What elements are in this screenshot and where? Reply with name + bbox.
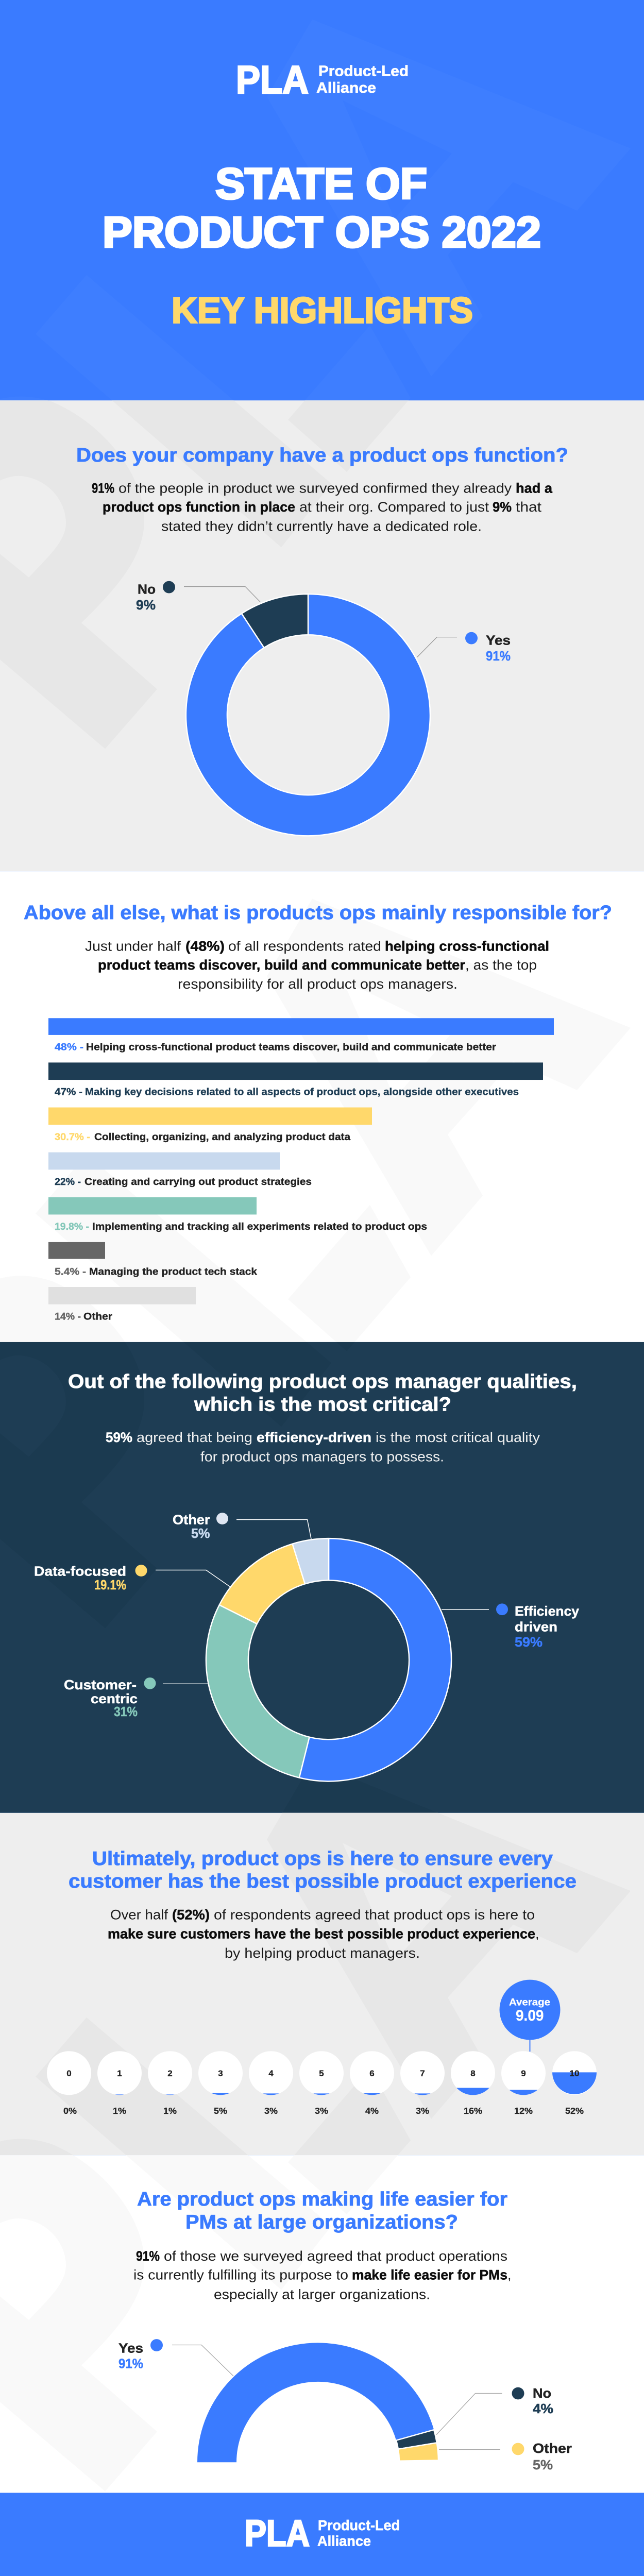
text block: of all respondents rated [228, 939, 381, 954]
score 7 [400, 2051, 445, 2116]
heading: customer has the best possible product experience [69, 1871, 577, 1892]
callout: customer-centric: centric [91, 1692, 138, 1706]
callout: other: Other [173, 1513, 210, 1527]
score 2: 2 [167, 2069, 173, 2078]
callout: efficiency driven: Efficiency [515, 1604, 580, 1619]
bar: tech stack 5.4%: Managing the product tech stack [89, 1266, 258, 1277]
score 1 [97, 2051, 142, 2116]
bar: other 14%: 14% - [55, 1311, 81, 1322]
text block: at their org. Compared to just [299, 499, 489, 515]
callout: data-focused [34, 1565, 230, 1592]
panel: header [104, 65, 540, 324]
heading: Ultimately, product ops is here to ensure every [92, 1848, 553, 1870]
score 5: 3% [315, 2106, 328, 2116]
text block: (52%) [172, 1907, 210, 1923]
callout: yes: Yes [118, 2341, 143, 2355]
text block: , [507, 2267, 512, 2283]
text block: of respondents agreed that product ops is here to [214, 1907, 535, 1923]
bar: product data 30.7%: Collecting, organizing, and analyzing product data [94, 1131, 351, 1143]
text block: of the people in product we surveyed confirmed they already [118, 481, 512, 496]
bar: key decisions 47% [48, 1062, 543, 1098]
callout: average score [500, 1980, 561, 2052]
score 5 [299, 2051, 344, 2116]
text block: especially at larger organizations. [214, 2286, 430, 2302]
text block: responsibility for all product ops managers. [178, 976, 457, 992]
bar: helping teams 48%: 48% - [55, 1042, 83, 1053]
text block: 91% [136, 2248, 160, 2264]
heading [69, 1848, 577, 1892]
logo: Product-Led Alliance: Alliance [316, 80, 376, 96]
score 9 [501, 2051, 546, 2116]
text block: 59% [106, 1430, 132, 1445]
rating scale 0 to 10 [47, 2051, 597, 2116]
callout: yes: Yes [486, 634, 511, 648]
logo: Product-Led Alliance [245, 2513, 400, 2554]
callout: data-focused: Data-focused [34, 1565, 126, 1579]
text block [106, 1430, 540, 1465]
callout: other: 5% [191, 1527, 210, 1541]
text block [133, 2248, 512, 2302]
callout: efficiency driven: driven [515, 1620, 557, 1634]
logo: Product-Led Alliance: Product-Led [318, 2517, 400, 2533]
title: PRODUCT OPS 2022 [103, 208, 541, 257]
panel: product ops function [0, 400, 644, 871]
bar: experiments 19.8%: Implementing and tracking all experiments related to product ops [92, 1221, 427, 1232]
text block: make life easier for PMs [352, 2267, 507, 2283]
bar: tech stack 5.4%: 5.4% - [55, 1266, 86, 1277]
heading: Above all else, what is products ops mainly responsible for? [24, 902, 612, 924]
text block: Just under half [85, 939, 181, 954]
text block: , [535, 1926, 539, 1941]
score 3 [198, 2051, 243, 2116]
panel: life easier for PMs [0, 2155, 644, 2493]
text block: Over half [110, 1907, 168, 1923]
score 0 [47, 2051, 91, 2116]
text block [85, 939, 549, 992]
score 3: 3 [218, 2069, 223, 2078]
heading [68, 1371, 577, 1416]
bar: helping teams 48%: Helping cross-functional product teams discover, build and communicate better [86, 1042, 496, 1053]
text block: efficiency-driven [257, 1430, 371, 1445]
panel: footer [0, 2493, 644, 2576]
title [103, 159, 541, 257]
score 9: 12% [514, 2106, 533, 2116]
callout: yes: 91% [486, 649, 511, 664]
bar: other 14%: Other [83, 1311, 112, 1322]
bar chart [48, 1018, 554, 1322]
callout: customer-centric [64, 1677, 208, 1719]
score 0: 0 [66, 2069, 72, 2078]
text block: product ops function in place [103, 499, 295, 515]
score 2 [148, 2051, 192, 2116]
heading: Does your company have a product ops function? [76, 445, 568, 466]
callout: average score: Average [509, 1997, 550, 2008]
bar: product strategies 22%: Creating and carrying out product strategies [84, 1176, 312, 1188]
bar: product data 30.7%: 30.7% - [55, 1131, 90, 1143]
callout: other [439, 2442, 572, 2472]
score 6: 4% [365, 2106, 379, 2116]
logo: Product-Led Alliance: PLA [245, 2513, 310, 2554]
logo: Product-Led Alliance: Product-Led [318, 63, 409, 79]
callout: no: No [138, 583, 156, 597]
score 8: 8 [470, 2069, 476, 2078]
score 1: 1% [113, 2106, 126, 2116]
panel: customer experience [0, 1812, 644, 2156]
score 6: 6 [369, 2069, 375, 2078]
callout: no [436, 2386, 553, 2435]
score 6 [350, 2051, 394, 2116]
callout: customer-centric: Customer- [64, 1678, 137, 1692]
bar: key decisions 47%: Making key decisions related to all aspects of product ops, alongside other executives [85, 1087, 519, 1098]
callout: no [136, 581, 260, 613]
callout: no: 4% [533, 2402, 553, 2416]
heading [137, 2189, 507, 2233]
score 8: 16% [464, 2106, 482, 2116]
score 0: 0% [63, 2106, 77, 2116]
bar: product data 30.7% [48, 1108, 372, 1143]
text block: had a [516, 481, 553, 496]
text block: of those we surveyed agreed that product operations [164, 2248, 507, 2264]
callout: yes [118, 2339, 233, 2376]
bar: experiments 19.8% [48, 1197, 427, 1232]
callout: efficiency driven [442, 1603, 580, 1650]
callout: other [173, 1513, 311, 1541]
callout: no: No [533, 2386, 551, 2401]
subtitle: key highlights: KEY HIGHLIGHTS [172, 290, 473, 331]
callout: data-focused: 19.1% [94, 1578, 126, 1592]
bar: other 14% [48, 1287, 196, 1322]
bar: helping teams 48% [48, 1018, 554, 1053]
title: STATE OF [215, 159, 427, 208]
text block [108, 1907, 539, 1961]
text block: make sure customers have the best possible product experience [108, 1926, 535, 1941]
score 4: 4 [268, 2069, 274, 2078]
text block: (48%) [185, 939, 225, 954]
score 4 [249, 2051, 293, 2116]
text block: stated they didn’t currently have a dedicated role. [161, 519, 482, 534]
text block: , as the top [465, 957, 537, 973]
callout: efficiency driven: 59% [515, 1635, 543, 1650]
text block: 9% [493, 499, 512, 515]
heading: Out of the following product ops manager qualities, [68, 1371, 577, 1393]
text block [92, 481, 553, 534]
text block: that [516, 499, 542, 515]
panel: main responsibility [0, 871, 644, 1342]
heading: PMs at large organizations? [185, 2212, 458, 2233]
score 2: 1% [163, 2106, 177, 2116]
bar: key decisions 47%: 47% - [55, 1087, 82, 1098]
score 9: 9 [521, 2069, 526, 2078]
text block: agreed that being [137, 1430, 252, 1445]
score 5: 5 [319, 2069, 324, 2078]
callout: yes [417, 632, 511, 664]
text block: is currently fulfilling its purpose to [133, 2267, 348, 2283]
panel: manager qualities [0, 1342, 644, 1813]
text block: for product ops managers to possess. [200, 1449, 444, 1465]
logo: Product-Led Alliance [236, 59, 409, 102]
score 8 [451, 2051, 495, 2116]
bar: tech stack 5.4% [48, 1242, 258, 1277]
callout: other: Other [533, 2442, 572, 2456]
score 10: 52% [565, 2106, 584, 2116]
score 7: 7 [420, 2069, 425, 2078]
score 3: 5% [214, 2106, 227, 2116]
bar: product strategies 22%: 22% - [55, 1176, 81, 1188]
heading: which is the most critical? [194, 1394, 451, 1416]
gauge chart [197, 2343, 438, 2462]
bar: experiments 19.8%: 19.8% - [55, 1221, 89, 1232]
score 1: 1 [117, 2069, 122, 2078]
text block: 91% [92, 481, 114, 496]
donut chart: yes 91, no 9 [186, 594, 430, 836]
score 4: 3% [264, 2106, 278, 2116]
text block: by helping product managers. [225, 1945, 420, 1961]
donut chart: manager qualities [206, 1538, 451, 1781]
logo: Product-Led Alliance: Alliance [317, 2533, 371, 2549]
text block: is the most critical quality [376, 1430, 540, 1445]
bar: product strategies 22% [48, 1153, 312, 1188]
callout: other: 5% [533, 2458, 553, 2472]
callout: customer-centric: 31% [114, 1705, 138, 1719]
score 7: 3% [416, 2106, 429, 2116]
text block: helping cross-functional [385, 939, 549, 954]
callout: average score: 9.09 [516, 2007, 544, 2024]
score 10 [552, 2051, 597, 2116]
heading: Are product ops making life easier for [137, 2189, 507, 2210]
text block: product teams discover, build and communicate better [98, 957, 466, 973]
logo: Product-Led Alliance: PLA [236, 59, 309, 102]
callout: no: 9% [136, 598, 156, 613]
callout: yes: 91% [118, 2357, 143, 2371]
score 10: 10 [570, 2069, 579, 2078]
